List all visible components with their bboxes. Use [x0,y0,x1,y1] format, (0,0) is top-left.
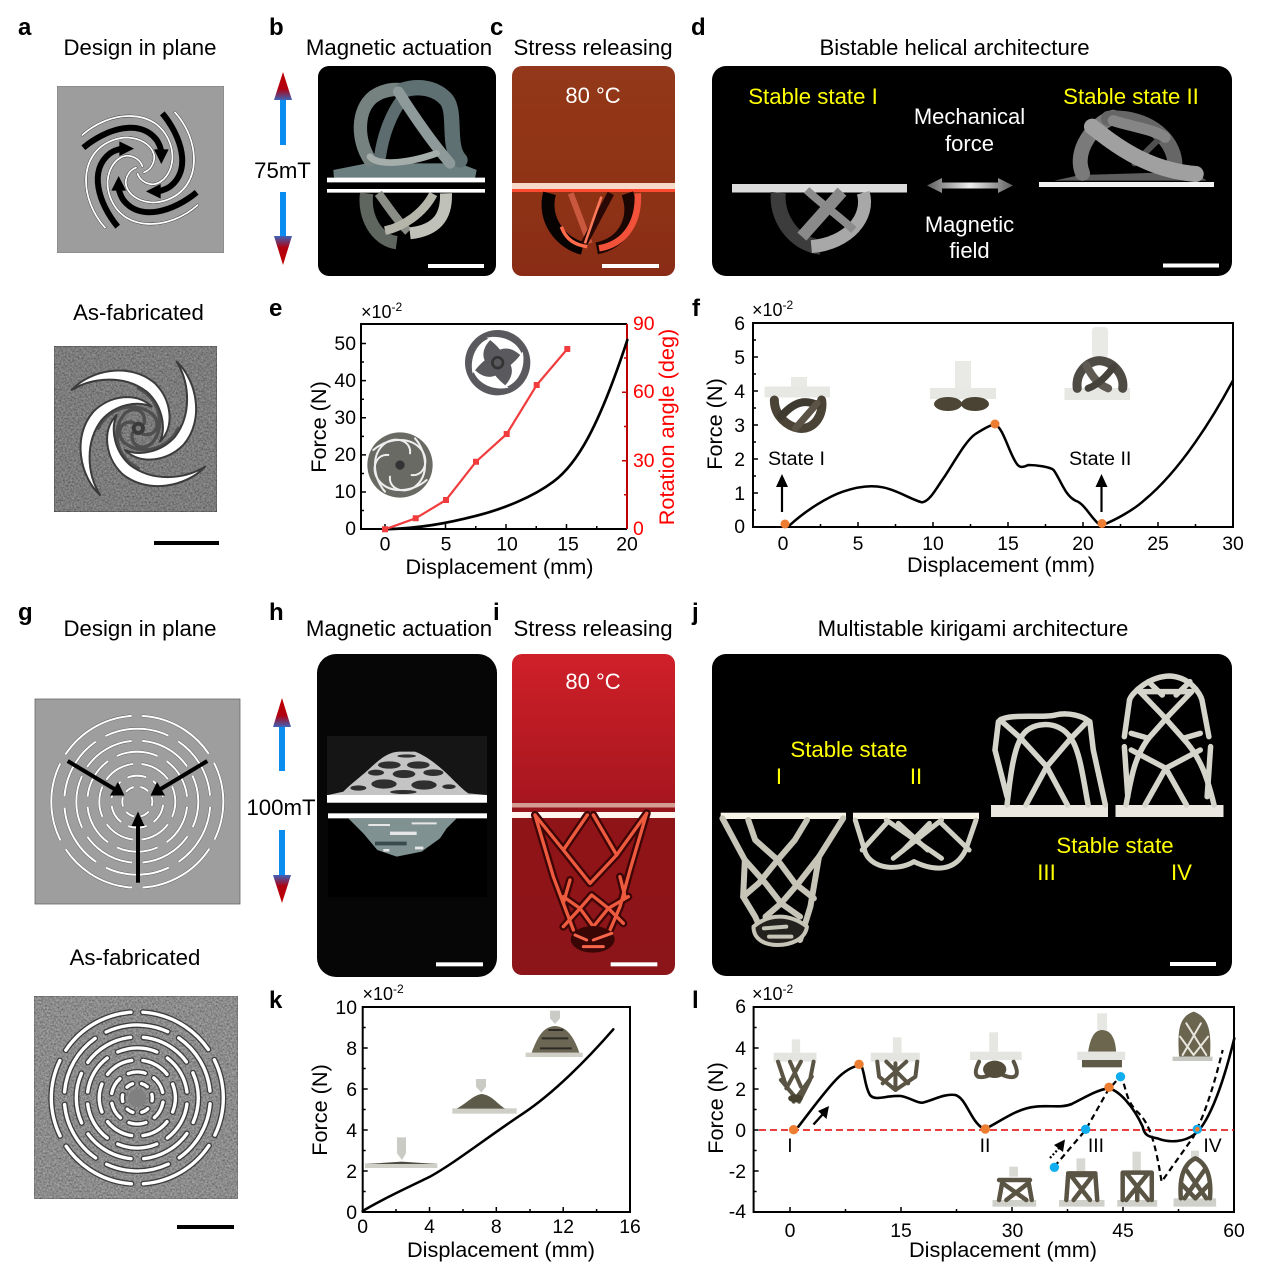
plot frame and axes [363,1007,630,1212]
stable state II helical structure [1039,117,1214,187]
x axis tick labels: 60 [1223,1220,1245,1242]
stable state roman labels: IV [1203,1135,1222,1157]
scale multiplier: ×10 [362,984,393,1004]
x axis tick labels: 0 [785,1220,796,1242]
x axis tick labels [357,1216,641,1238]
scale bar [154,541,219,545]
stable state labels for III and IV [1037,833,1192,885]
panel letter h: h [269,599,284,626]
y axis tick labels: 0 [346,1202,357,1224]
heated helical structure photo panel [512,66,675,276]
y axis tick labels: 40 [334,370,356,392]
right axis tick labels: 60 [633,381,655,403]
x axis tick labels [785,1220,1245,1242]
heading: stress releasing: Stress releasing [513,35,673,60]
x axis tick labels: 5 [853,533,863,555]
inset photos of deforming lattice [365,1011,583,1168]
black photo panel with two stable states [712,66,1232,276]
x axis tick labels: 20 [1072,533,1094,555]
scale bar [428,264,484,268]
panel letter k: k [269,987,283,1014]
stable state III lattice [991,714,1108,817]
stable state IV lattice [1116,676,1224,817]
panel letter c: c [490,14,503,41]
plot frame and axes [754,1007,1234,1212]
stable state labels for I and II: I [776,764,782,789]
field strength label: 100mT [246,795,316,820]
helical structure photo panel [318,66,496,276]
concentric cut pattern design [18,683,256,921]
black photo panel with four stable states [712,654,1232,976]
x axis tick labels: 0 [357,1216,368,1238]
scale multiplier: ×10 [752,984,783,1004]
scale bar [1170,962,1216,966]
y axis tick labels [734,313,745,538]
stable state roman labels: III [1088,1135,1104,1157]
stable state labels for I and II [776,737,922,789]
heading: magnetic actuation: Magnetic actuation [306,616,492,641]
x axis tick labels: 30 [1222,533,1244,555]
y axis tick labels: 8 [346,1038,357,1060]
stable state I lattice [721,813,846,945]
field strength label: 75mT [254,158,311,183]
force displacement curve [363,1029,613,1211]
heading: magnetic actuation: Magnetic actuation [306,35,492,60]
temperature label: 80 °C [565,83,621,108]
mechanical force label: force [945,131,994,156]
panel k: force displacement chart of lattice [269,982,641,1262]
inset state II photo [1064,327,1130,400]
panel letter a: a [18,14,32,41]
plot frame and axes [361,324,627,529]
panel g: circular kirigami design and as-fabricated sheet [18,599,257,1229]
scale multiplier: -2 [783,298,794,312]
double-headed arrow [927,178,1013,193]
scale bar [1163,264,1219,268]
inset photos above curve [774,1012,1212,1102]
panel letter d: d [691,14,706,41]
y axis tick labels: -2 [729,1161,746,1183]
state II label: State II [1069,448,1131,470]
y axis tick labels: 5 [734,347,745,369]
y axis title: Force (N) [306,381,331,473]
force displacement curve [790,381,1233,525]
key point markers [780,420,1106,528]
heading: as-fabricated: As-fabricated [73,300,204,325]
x axis title: Displacement (mm) [407,1237,595,1262]
scale bar [602,264,659,268]
magnetic field arrow down [274,192,292,265]
dome lattice photo panel [317,654,497,977]
mechanical force label [914,104,1025,156]
right axis tick labels [633,313,655,540]
right axis tick labels: 90 [633,313,655,335]
blue markers [1050,1072,1202,1172]
dashed force curve [1054,1050,1223,1182]
y axis tick labels: 6 [346,1079,357,1101]
magnetic field arrow up [273,698,291,771]
stable state II lattice [853,813,979,868]
magnetic field arrow down [273,830,291,903]
x axis tick labels [380,534,638,556]
panel j: multistable kirigami architecture [691,599,1232,976]
scale multiplier: -2 [392,300,403,314]
stable state roman labels: II [980,1135,990,1157]
x axis tick labels: 45 [1112,1220,1134,1242]
stable state I label: Stable state I [748,84,878,109]
inset photos below curve [993,1151,1216,1207]
panel d: bistable helical architecture [691,14,1232,276]
scale multiplier: ×10 [752,300,783,320]
panel letter l: l [692,987,699,1014]
y axis tick labels: 4 [346,1120,357,1142]
panel i: stress releasing of lattice [493,599,675,975]
dotted direction arrow [1050,1140,1065,1158]
y axis tick labels: 4 [734,381,745,403]
y axis title: Force (N) [702,378,727,470]
force curve [385,340,627,529]
x axis tick labels: 25 [1147,533,1169,555]
solid direction arrow [814,1106,829,1124]
y axis tick labels [334,333,356,540]
panel letter i: i [493,599,500,626]
x axis title: Displacement (mm) [909,1237,1097,1262]
right axis title: Rotation angle (deg) [654,329,679,525]
x axis title: Displacement (mm) [907,552,1095,577]
panel letter j: j [691,599,699,626]
x axis tick labels: 10 [922,533,944,555]
magnetic field label [925,212,1014,263]
stable state roman labels [787,1135,1222,1157]
stable state labels for I and II: II [910,764,922,789]
x axis tick labels: 10 [496,534,518,556]
x axis tick labels [778,533,1244,555]
y axis tick labels [729,996,746,1223]
stable state labels for III and IV: III [1037,860,1056,885]
magnetic field arrow up [274,72,292,145]
heading: as-fabricated: As-fabricated [70,945,200,970]
x axis tick labels: 15 [997,533,1019,555]
x axis tick labels: 8 [491,1216,502,1238]
y axis tick labels: 2 [735,1079,746,1101]
heading: design in plane: Design in plane [64,35,216,60]
scale multiplier: -2 [783,982,794,996]
inset state I photo [764,377,830,428]
x axis tick labels: 5 [441,534,451,556]
heading: design in plane: Design in plane [64,616,216,641]
panel f: force displacement chart of bistable structure [692,295,1244,577]
mechanical force label: Mechanical [914,104,1025,129]
x axis tick labels: 12 [552,1216,574,1238]
magnetic field label: field [949,238,990,263]
y axis title: Force (N) [307,1064,332,1156]
heading: bistable helical architecture: Bistable helical architecture [819,35,1090,60]
panel e: force and rotation angle chart [269,295,679,579]
stable state labels for I and II: Stable state [790,737,908,762]
y axis tick labels: 0 [345,518,356,540]
scale multiplier: ×10 [361,302,392,322]
x axis tick labels: 20 [616,534,638,556]
stable state labels for III and IV: IV [1171,860,1192,885]
y axis tick labels: 6 [735,996,746,1018]
right axis tick labels: 0 [633,518,644,540]
inward arrows [68,761,207,883]
spiral cut pattern design [57,86,224,253]
as-fabricated concentric sheet photo [18,979,257,1217]
y axis tick labels: 4 [735,1038,746,1060]
inset disk: flat spiral [367,432,433,498]
y axis tick labels: 6 [734,313,745,335]
arrow to state II [1096,474,1108,512]
panel letter g: g [18,599,33,626]
stable state II label: Stable state II [1063,84,1199,109]
zero force dashed line [759,1129,1234,1131]
y axis tick labels: 10 [334,481,356,503]
y axis tick labels: 10 [335,997,357,1019]
y axis tick labels: 50 [334,333,356,355]
inset middle state photo [930,361,996,411]
x axis tick labels: 16 [619,1216,641,1238]
scale multiplier: -2 [393,982,404,996]
scale bar [177,1225,234,1229]
stable state roman labels: I [787,1135,793,1157]
inset disk: deployed spiral [465,330,530,395]
solid force curve [798,1038,1234,1141]
panel h: magnetic actuation of lattice [246,599,497,977]
arrow to state I [776,474,788,512]
y axis tick labels [335,997,357,1224]
y axis tick labels: 0 [735,1120,746,1142]
x axis tick labels: 0 [778,533,789,555]
y axis tick labels: 2 [346,1161,357,1183]
y axis tick labels: 30 [334,407,356,429]
y axis tick labels: -4 [729,1201,746,1223]
stable state labels for III and IV: Stable state [1056,833,1174,858]
plot frame and axes [753,323,1233,527]
rotation angle series [382,346,570,532]
panel b: magnetic actuation [254,14,496,276]
panel a: spiral design and as-fabricated sheet [18,14,224,545]
x axis tick labels: 0 [380,534,391,556]
heated lattice photo panel [512,654,675,975]
right axis tick labels: 30 [633,450,655,472]
y axis tick labels: 1 [734,483,745,505]
x axis tick labels: 15 [890,1220,912,1242]
panel letter e: e [269,295,282,322]
panel l: multistable force displacement chart [692,982,1245,1262]
temperature label: 80 °C [565,669,621,694]
x axis tick labels: 30 [1002,1220,1023,1242]
as-fabricated spiral sheet photo [54,346,217,512]
panel letter b: b [269,14,284,41]
y axis tick labels: 0 [734,516,745,538]
panel c: stress releasing [490,14,675,276]
x axis tick labels: 4 [424,1216,435,1238]
magnetic field label: Magnetic [925,212,1014,237]
y axis tick labels: 3 [734,415,745,437]
x axis title: Displacement (mm) [406,554,594,579]
y axis tick labels: 2 [734,449,745,471]
orange markers [789,1060,1114,1134]
stable state I helical structure [732,184,907,247]
panel letter f: f [692,295,701,322]
y axis title: Force (N) [703,1062,728,1154]
x axis tick labels: 15 [557,534,579,556]
state I label: State I [768,448,825,470]
heading: multistable kirigami architecture: Multistable kirigami architecture [818,616,1128,641]
y axis tick labels: 20 [334,444,356,466]
heading: stress releasing: Stress releasing [513,616,673,641]
